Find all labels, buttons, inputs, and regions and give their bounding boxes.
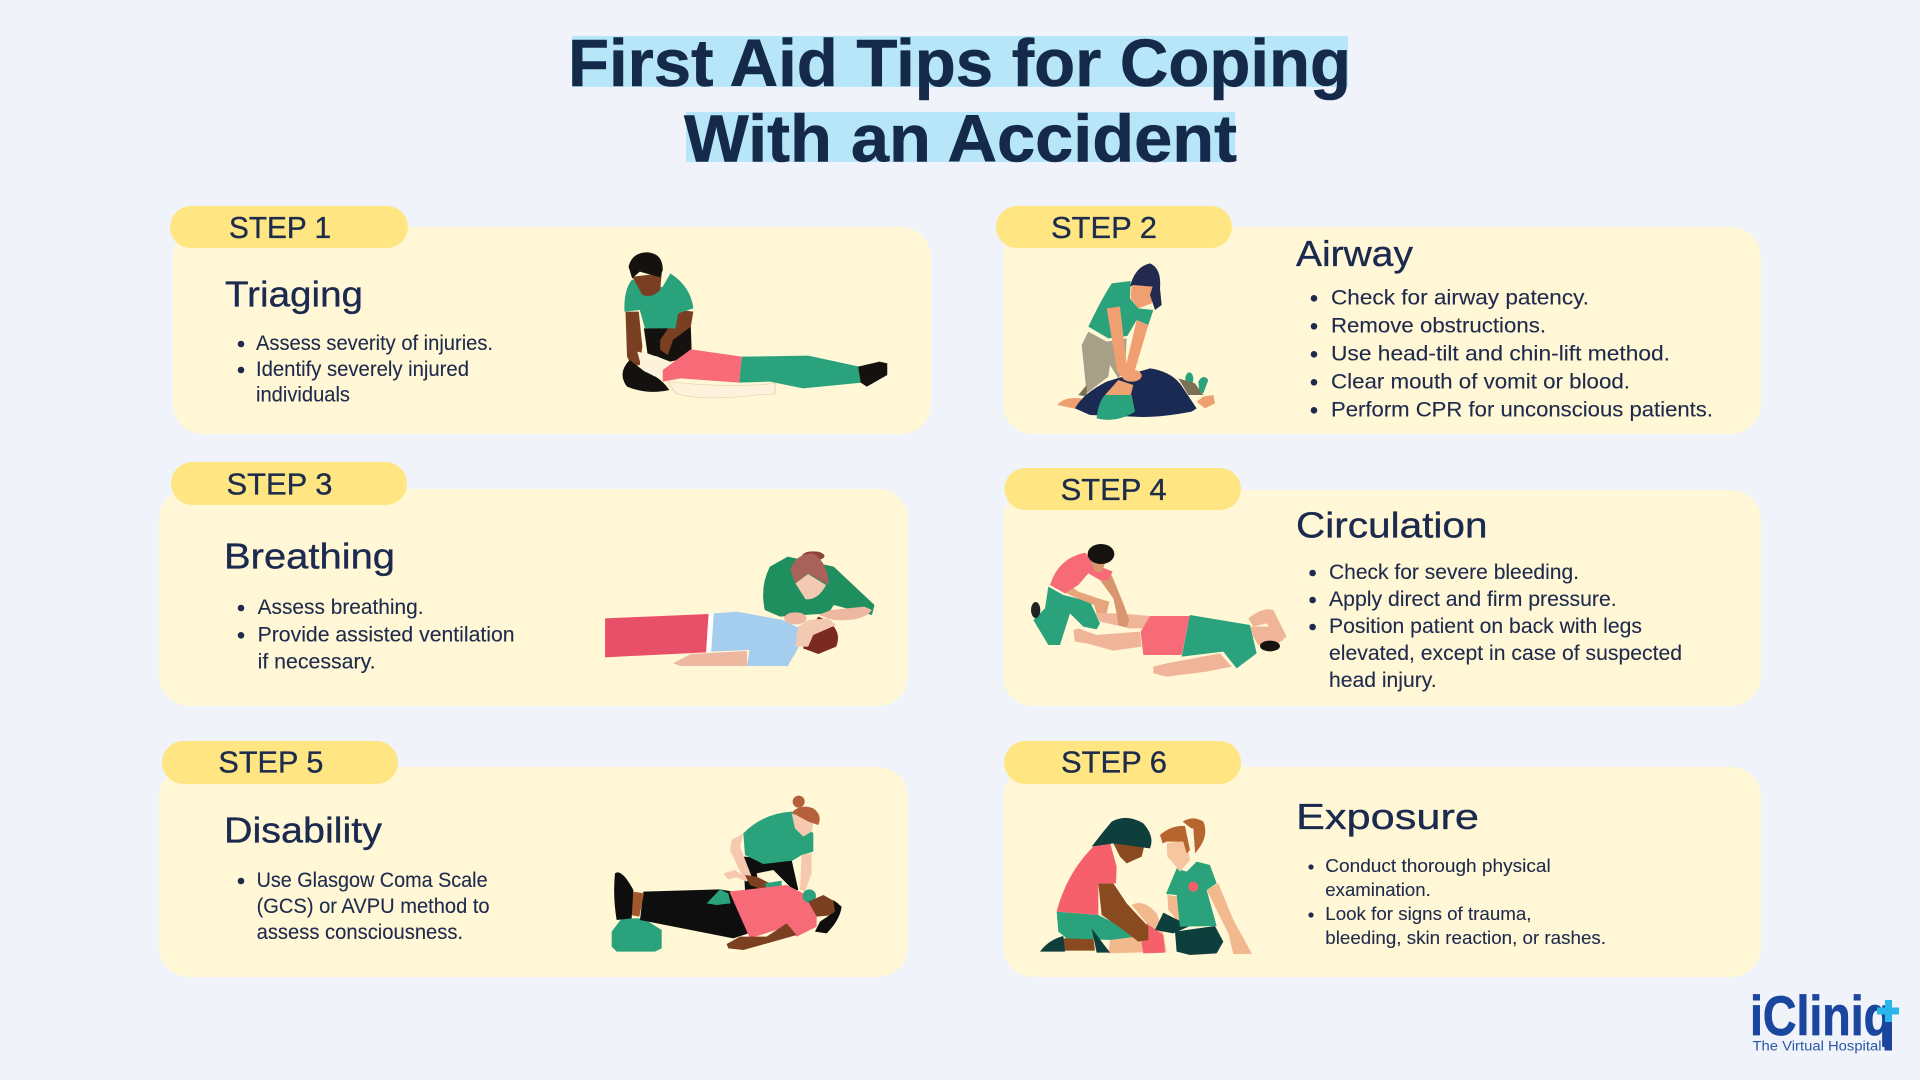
panel: step 6 exposure [1003,741,1761,977]
illustration: assisted ventilation [605,551,874,666]
panel: step 3 breathing [159,462,908,706]
bullet list: disability: Use Glasgow Coma Scale [257,869,488,892]
step 1 badge [170,206,408,248]
step 4 badge [1004,468,1241,510]
bullet list: circulation [1309,561,1682,692]
bullet list: circulation: Check for severe bleeding. [1329,561,1579,584]
panel: step 5 disability [159,741,908,977]
illustration: physical examination [1040,818,1252,955]
bullet list: exposure: Look for signs of trauma, [1325,903,1532,924]
bullet list: triaging: Identify severely injured [256,358,469,381]
heading: triaging: Triaging [225,274,363,314]
step 5 badge [162,741,398,784]
step 5 badge: STEP 5 [218,745,323,779]
title: First Aid Tips for Coping [568,26,1351,101]
bullet list: triaging: Assess severity of injuries. [256,332,493,355]
step 6 badge: STEP 6 [1061,745,1167,779]
bullet list: circulation: elevated, except in case of suspected [1329,642,1682,665]
illustration: checking for bleeding [1031,544,1287,677]
bullet list: exposure: Conduct thorough physical [1325,855,1551,876]
bullet list: exposure [1308,855,1606,948]
bullet list: airway: Clear mouth of vomit or blood. [1331,370,1630,393]
heading: exposure: Exposure [1296,796,1479,837]
bullet list: exposure: examination. [1325,879,1431,900]
panel: step 4 circulation [1003,468,1761,706]
title [568,26,1351,176]
heading: airway: Airway [1296,233,1413,274]
heading: circulation: Circulation [1296,504,1488,545]
bullet list: airway [1311,286,1713,421]
bullet list: disability [238,869,490,944]
bullet list: disability: assess consciousness. [257,921,463,944]
bullet list: breathing: if necessary. [258,650,376,673]
bullet list: triaging [238,332,493,407]
illustration: CPR [1057,263,1215,420]
title: With an Accident [684,102,1237,176]
step 6 badge [1004,741,1241,784]
step 4 badge: STEP 4 [1061,473,1167,507]
bullet list: exposure: bleeding, skin reaction, or rashes. [1325,927,1606,948]
panel: step 1 triaging [170,206,931,434]
bullet list: airway: Check for airway patency. [1331,286,1589,309]
heading: breathing: Breathing [224,535,395,576]
bullet list: breathing: Provide assisted ventilation [258,623,515,646]
bullet list: breathing: Assess breathing. [258,596,424,619]
illustration: rescuer checking patient [623,252,887,398]
step 3 badge: STEP 3 [226,467,332,501]
heading: disability: Disability [224,809,382,850]
logo: iCliniq: The Virtual Hospital [1752,1039,1882,1054]
step 1 badge: STEP 1 [229,211,331,245]
bullet list: disability: (GCS) or AVPU method to [257,895,490,918]
step 2 badge [996,206,1232,248]
logo: iCliniq: iCliniq [1750,984,1892,1047]
illustration: assessing consciousness [612,796,842,952]
bullet list: triaging: individuals [256,384,350,407]
bullet list: breathing [238,596,515,673]
bullet list: airway: Use head-tilt and chin-lift method. [1331,342,1670,365]
bullet list: airway: Perform CPR for unconscious patients. [1331,398,1713,421]
bullet list: circulation: Apply direct and firm pressure. [1329,588,1617,611]
bullet list: circulation: Position patient on back with legs [1329,615,1642,638]
bullet list: circulation: head injury. [1329,669,1437,692]
step 2 badge: STEP 2 [1051,211,1157,245]
step 3 badge [171,462,407,505]
panel: step 2 airway [996,206,1761,434]
bullet list: airway: Remove obstructions. [1331,314,1546,337]
